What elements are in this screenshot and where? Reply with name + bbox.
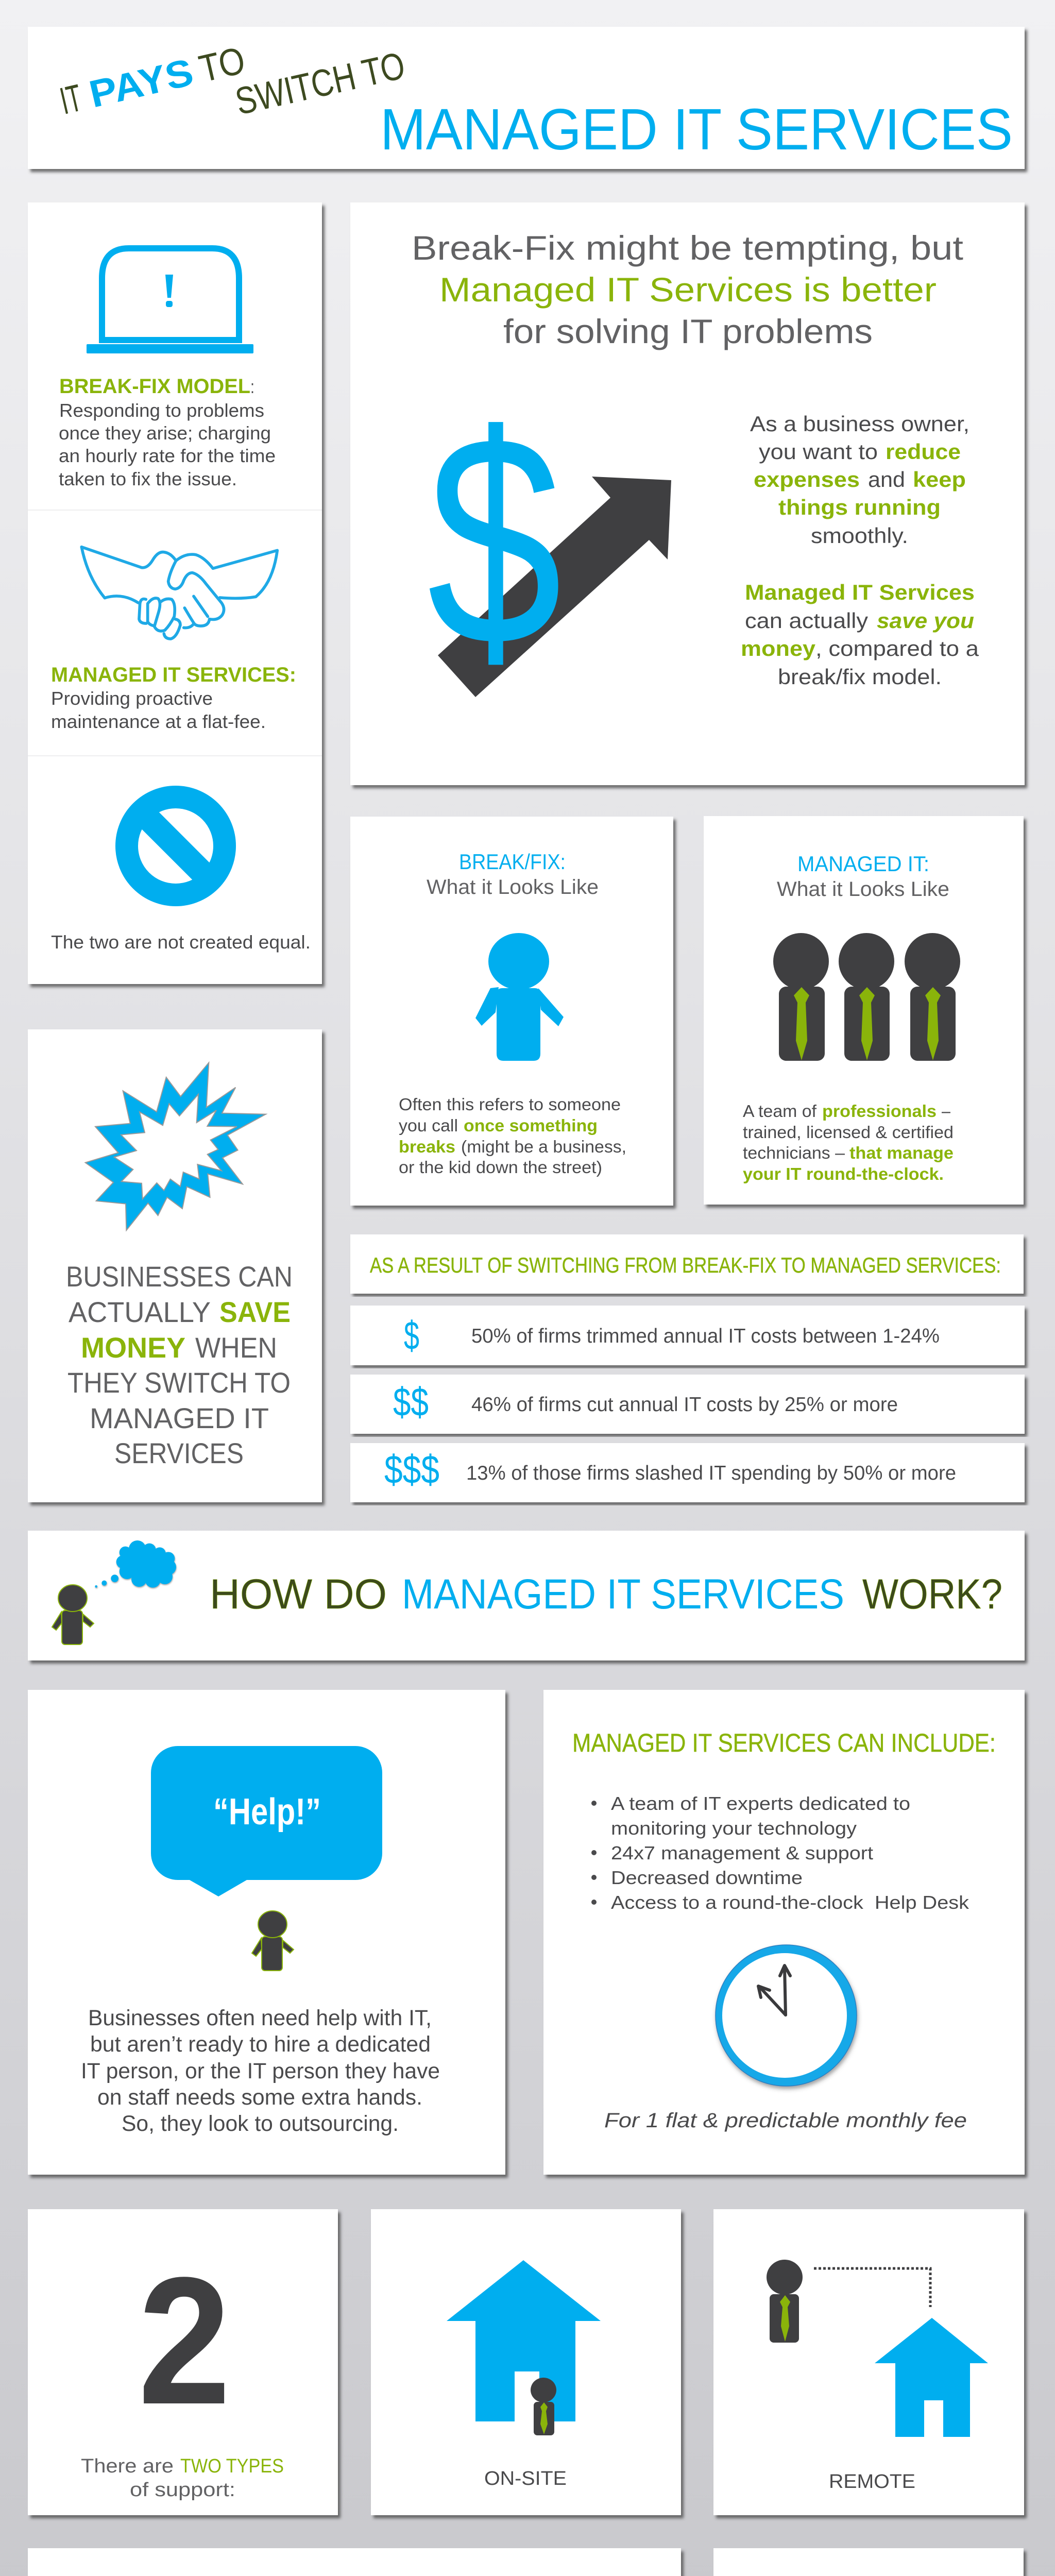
panel: remote (713, 2209, 1024, 2515)
panel: result 46 percent (350, 1375, 1025, 1434)
text: businesses often need help (81, 2006, 440, 2136)
text: businesses can save money: MANAGED IT (90, 1402, 269, 1434)
text: break/fix description: (might be a business, (461, 1137, 626, 1156)
text: managed IT services definition: MANAGED IT SERVICES: (51, 664, 296, 686)
icon: thinking person (52, 1540, 176, 1645)
list: included services: 24x7 management & support (611, 1842, 873, 1863)
text: break-fix model definition: BREAK-FIX MODEL (59, 375, 250, 398)
panel: on-site (371, 2209, 681, 2515)
text: break-fix model definition (59, 375, 276, 489)
text: 13 percent of firms: 13% of those firms slashed IT spending by 50% or more (466, 1462, 956, 1484)
text: businesses can save money: WHEN (195, 1331, 277, 1364)
panel: help (28, 1690, 505, 2175)
text: managed IT description: A team of (743, 1101, 817, 1121)
text: there are two types of support (81, 2455, 284, 2501)
text: break-fix model definition: : (250, 376, 254, 397)
icon: no sign (127, 797, 225, 895)
icon: rising arrow (438, 477, 671, 697)
text: save money paragraph: Managed IT Services (745, 580, 975, 604)
text: managed IT services definition: maintenance at a flat-fee. (51, 711, 266, 732)
text: 46 percent of firms: 46% of firms cut annual IT costs by 25% or more (471, 1394, 898, 1416)
text: managed IT services definition: Providing proactive (51, 688, 213, 709)
text: businesses can save money: ACTUALLY (69, 1296, 211, 1328)
heading: break/fix: What it Looks Like (427, 876, 599, 899)
text: businesses can save money: MONEY (81, 1331, 185, 1364)
title: It pays to: PAYS (85, 50, 197, 116)
text: managed IT description: trained, licensed & certified (743, 1123, 954, 1142)
heading: break-fix tempting: Break-Fix might be tempting, but (412, 229, 963, 267)
panel: two types (28, 2209, 338, 2515)
text: there are two types of support: of support: (130, 2479, 235, 2501)
text: business owner paragraph: keep (913, 467, 966, 492)
heading: how do managed IT services work (210, 1571, 1002, 1618)
text: save money paragraph (741, 580, 979, 689)
text: businesses often need help: but aren’t ready to hire a dedicated (90, 2032, 431, 2057)
text: business owner paragraph: things running (778, 495, 941, 519)
text: managed IT description: professionals (822, 1101, 937, 1121)
title: It pays to: TO (195, 39, 249, 90)
icon: remote technician and house (767, 2260, 988, 2437)
text: business owner paragraph: you want to (759, 439, 878, 464)
heading: managed IT: What it Looks Like (777, 878, 949, 901)
icon: handshake (81, 547, 277, 639)
icon: one dollar: $ (404, 1313, 419, 1358)
text: save money paragraph: , compared to a (815, 636, 979, 660)
text: flat predictable monthly fee: For 1 flat & predictable monthly fee (604, 2109, 967, 2132)
panel: break/fix looks like (350, 817, 673, 1206)
text: business owner paragraph: smoothly. (811, 523, 908, 548)
panel: results heading (350, 1234, 1024, 1294)
panel: how do managed IT services work (28, 1531, 1025, 1660)
icon: team of three people with ties (773, 933, 960, 1061)
text: break/fix description: or the kid down the street) (399, 1158, 602, 1177)
text: break-fix model definition: taken to fix the issue. (59, 468, 237, 489)
icon: house with technician (447, 2260, 601, 2435)
list: included services: A team of IT experts dedicated to (611, 1793, 910, 1814)
text: managed IT description: that manage (849, 1143, 954, 1162)
label: remote: REMOTE (829, 2471, 915, 2493)
heading: can include: MANAGED IT SERVICES CAN INCLUDE: (572, 1728, 996, 1757)
heading: how do managed IT services work: WORK? (862, 1571, 1002, 1618)
text: businesses can save money (66, 1260, 293, 1469)
text: business owner paragraph (750, 412, 969, 548)
list: included services: Decreased downtime (611, 1867, 803, 1888)
heading: how do managed IT services work: MANAGED IT SERVICES (402, 1571, 844, 1618)
number: 2: 2 (138, 2240, 231, 2442)
text: business owner paragraph: expenses (754, 467, 860, 492)
icon: three dollars: $$$ (384, 1447, 439, 1492)
title: It pays to (56, 39, 249, 123)
icon: burst (86, 1063, 266, 1230)
text: save money paragraph: break/fix model. (778, 665, 942, 689)
list: included services: monitoring your technology (611, 1818, 857, 1839)
text: businesses can save money: SAVE (219, 1296, 291, 1328)
label: on-site: ON-SITE (484, 2468, 567, 2489)
panel: break-fix vs managed intro (350, 202, 1025, 785)
text: there are two types of support: TWO TYPES (180, 2455, 284, 2477)
heading: managed IT: MANAGED IT: (797, 852, 929, 876)
list: included services: Access to a round-the-clock Help Desk (611, 1892, 969, 1913)
heading: managed IT (777, 852, 949, 901)
text: break-fix model definition: Responding to problems (59, 400, 264, 421)
text: managed IT description (743, 1101, 954, 1183)
title: managed IT services: MANAGED IT SERVICES (380, 97, 1013, 162)
heading: how do managed IT services work: HOW DO (210, 1571, 387, 1618)
text: businesses often need help: IT person, or the IT person they have (81, 2059, 440, 2083)
icon: speech bubble: “Help!” (213, 1791, 321, 1833)
panel: definitions column (28, 202, 322, 984)
title: It pays to: IT (56, 76, 86, 123)
text: save money paragraph: money (741, 636, 816, 660)
panel: result 13 percent (350, 1443, 1025, 1502)
text: business owner paragraph: As a business owner, (750, 412, 969, 436)
panel: title (28, 27, 1025, 169)
heading: break-fix tempting (412, 229, 963, 350)
text: business owner paragraph: reduce (886, 439, 961, 464)
text: managed IT services definition (51, 664, 296, 732)
icon: blue person (475, 933, 564, 1061)
text: save money paragraph: can actually (745, 608, 868, 633)
text: break/fix description (399, 1095, 626, 1177)
heading: break-fix tempting: Managed IT Services is better (439, 270, 937, 309)
text: break/fix description: once something (464, 1116, 598, 1135)
text: businesses often need help: So, they look to outsourcing. (122, 2111, 399, 2136)
text: businesses often need help: on staff needs some extra hands. (97, 2085, 422, 2110)
text: businesses can save money: SERVICES (114, 1437, 244, 1469)
panel: result 50 percent (350, 1306, 1025, 1365)
panel: smiling laptop (713, 2548, 1024, 2576)
icon: small person (252, 1911, 294, 1971)
heading: break/fix (427, 850, 599, 899)
text: managed IT description: technicians – (743, 1143, 845, 1162)
text: businesses can save money: THEY SWITCH TO (67, 1366, 291, 1399)
text: businesses often need help: Businesses often need help with IT, (88, 2006, 432, 2030)
heading: break/fix: BREAK/FIX: (459, 850, 566, 874)
text: not created equal: The two are not created equal. (51, 931, 311, 953)
text: there are two types of support: There are (81, 2455, 174, 2477)
panel: conclusion (28, 2548, 681, 2576)
text: break/fix description: you call (399, 1116, 458, 1135)
panel: managed IT looks like (704, 816, 1024, 1205)
list: included services (591, 1793, 969, 1913)
title: switch to: SWITCH TO (231, 44, 409, 123)
text: managed IT description: – (942, 1101, 951, 1121)
icon: two dollars: $$ (393, 1379, 429, 1425)
text: businesses can save money: BUSINESSES CAN (66, 1260, 293, 1293)
text: 50 percent of firms: 50% of firms trimmed annual IT costs between 1-24% (471, 1325, 940, 1347)
panel: save money callout (28, 1029, 322, 1502)
icon: clock (716, 1945, 857, 2086)
text: break-fix model definition: once they arise; charging (59, 422, 271, 444)
panel: managed IT services can include (543, 1690, 1025, 2175)
text: break/fix description: Often this refers to someone (399, 1095, 621, 1114)
text: save money paragraph: save you (877, 608, 974, 633)
icon: speech bubble (151, 1746, 382, 1896)
icon: dollar sign: $ (427, 374, 562, 708)
text: business owner paragraph: and (868, 467, 905, 492)
text: break/fix description: breaks (399, 1137, 455, 1156)
text: managed IT description: your IT round-the-clock. (743, 1164, 944, 1183)
icon: laptop with exclamation (87, 248, 253, 353)
heading: break-fix tempting: for solving IT problems (503, 312, 873, 350)
text: break-fix model definition: an hourly rate for the time (59, 445, 276, 466)
